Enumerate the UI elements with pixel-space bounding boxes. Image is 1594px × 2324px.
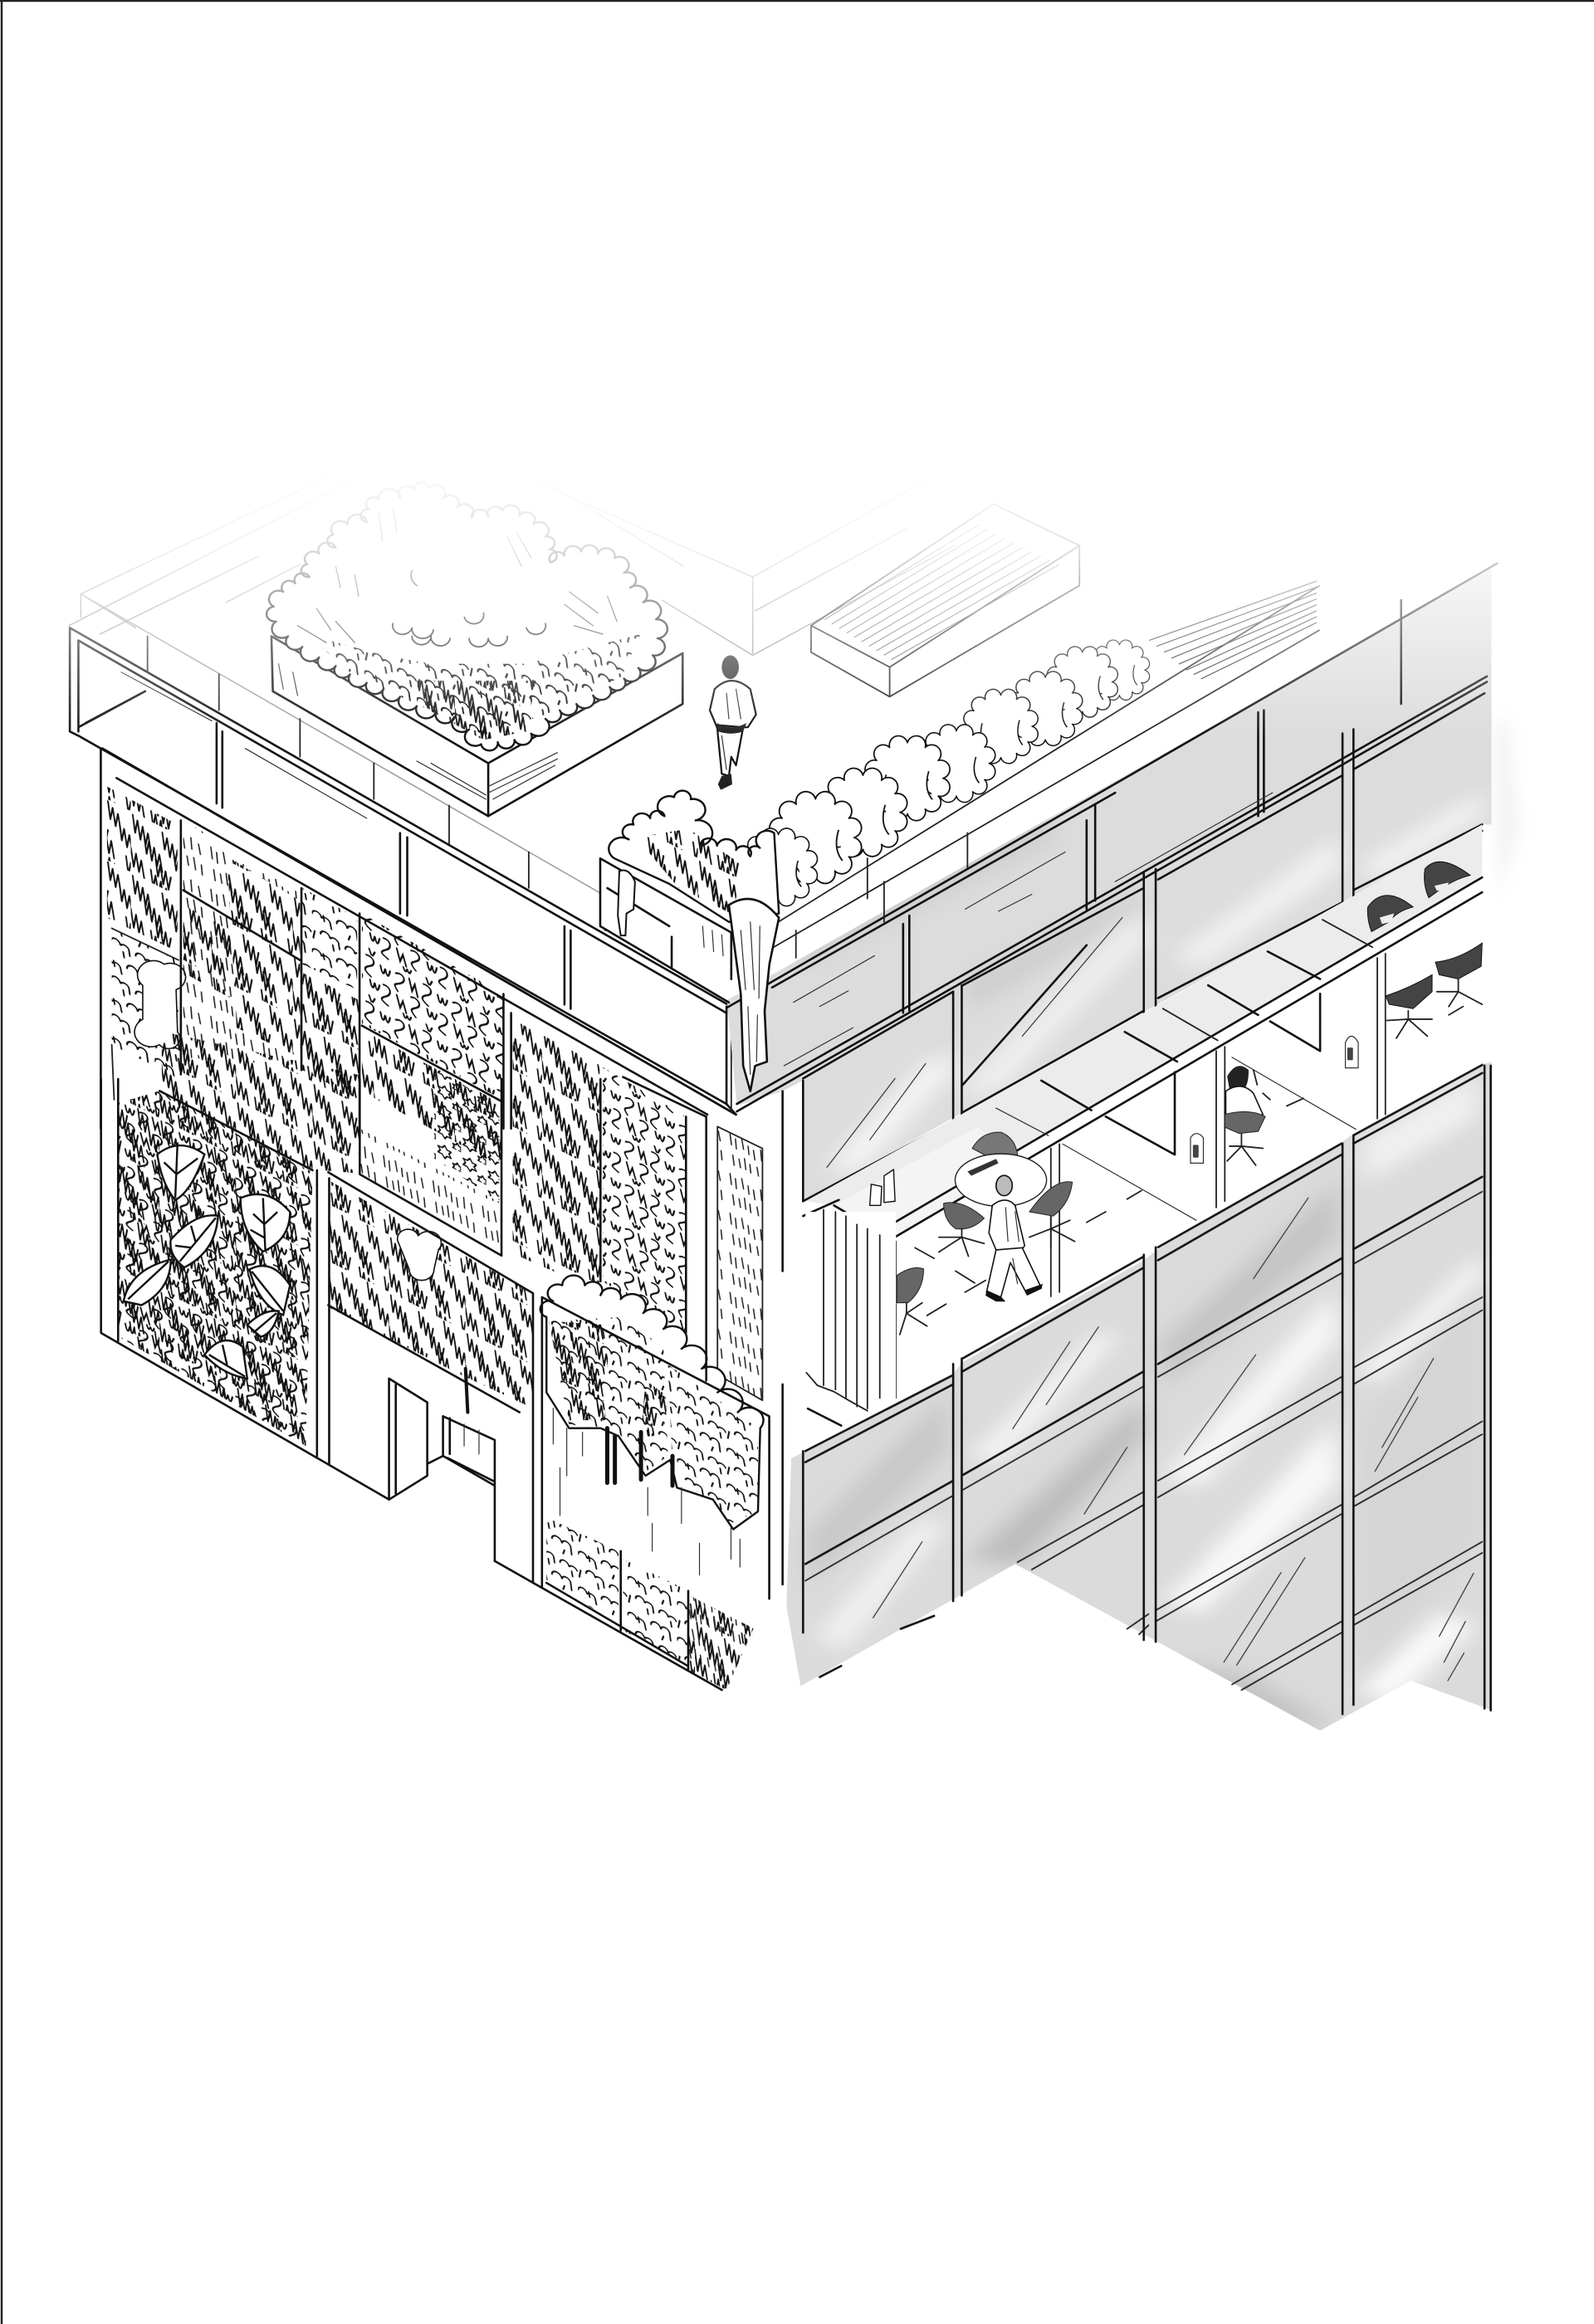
grey glass fill — [726, 569, 1492, 1201]
lower glazing — [783, 1062, 1492, 1732]
planting panel: small leaves — [302, 888, 357, 989]
person walking in office — [985, 1175, 1043, 1301]
panel: right glass curtain wall — [726, 564, 1498, 1732]
sparse grass panel — [359, 1129, 501, 1256]
bush panel lower left — [546, 1517, 619, 1623]
wall outline — [100, 749, 736, 1129]
planting panel: reeds — [302, 973, 359, 1100]
fade overlay on rooftop — [5, 465, 1594, 739]
vertical mullions — [783, 600, 1401, 1271]
soft shadow on right edge — [1494, 714, 1519, 896]
grass panel lower right — [688, 1594, 754, 1690]
planting panel: fern lower — [362, 1030, 502, 1168]
planting panel: fern column — [107, 787, 178, 951]
lower mullions — [783, 1066, 1491, 1714]
panel: roof-edge planters drawn over the glass — [740, 581, 1320, 949]
planting panel: mixed foliage — [362, 914, 502, 1100]
round meeting table and chairs — [897, 1132, 1074, 1335]
band above monstera panel — [162, 1032, 359, 1174]
entrance doorway — [389, 1379, 495, 1561]
bush panel lower middle — [623, 1559, 688, 1664]
parapet band — [70, 627, 736, 1115]
drip ticks below hanging bush — [553, 1409, 740, 1575]
tall fern panel — [513, 1019, 599, 1291]
dark chairs at far end — [1367, 862, 1482, 1038]
planting panel: grass column — [183, 820, 300, 1066]
grey glass fill — [786, 1062, 1492, 1732]
small hanging tendril — [618, 870, 635, 935]
long planter front edge and bush chain — [740, 581, 1320, 949]
glass reflection marks — [784, 793, 1273, 1167]
rooftop planter with grasses — [811, 504, 1079, 696]
monstera panel — [119, 1091, 312, 1446]
mixed planting panel — [603, 1067, 686, 1333]
planting panel: hanging fern — [183, 857, 300, 1057]
narrow grass panel — [717, 1126, 762, 1400]
parapet lines — [726, 564, 1498, 1111]
door frames below beam — [1106, 994, 1320, 1155]
planting panel: bush column — [112, 928, 186, 1100]
upper glazing and parapet — [726, 564, 1498, 1271]
large bush — [266, 482, 667, 750]
foliage panel above entrance — [328, 1180, 533, 1413]
green wall lower panels — [101, 1019, 770, 1690]
panel: roof terrace — [69, 477, 1079, 1115]
corner bush — [609, 791, 779, 922]
faded glass railing — [69, 477, 603, 895]
floor slab and transom lines — [805, 1065, 1482, 1462]
large rooftop box — [526, 477, 956, 656]
bush cluster along roof edge — [740, 640, 1150, 906]
open floor interior — [803, 824, 1482, 1426]
ceiling soffit — [803, 824, 1482, 1239]
wall framing and base line — [101, 1077, 770, 1690]
person walking on roof — [710, 656, 756, 790]
flower panel — [434, 1067, 499, 1202]
long hanging vine — [729, 899, 779, 1091]
hanging bush panel — [540, 1276, 764, 1530]
partitions — [887, 954, 1386, 1403]
monstera leaves — [124, 1142, 290, 1379]
reflection marks — [873, 1198, 1474, 1681]
curtain — [805, 1209, 896, 1426]
corner planter with vine — [600, 791, 779, 1091]
seated person at desk — [1225, 1066, 1270, 1165]
planter with vine at corner — [600, 791, 779, 1091]
wall socket panels — [1191, 1036, 1358, 1163]
bottles on shelf — [870, 1169, 895, 1205]
panel: left green wall elevation — [100, 749, 770, 1690]
green wall upper panels — [100, 749, 736, 1168]
floor joints — [996, 1057, 1356, 1220]
planter with large bush — [266, 482, 682, 816]
